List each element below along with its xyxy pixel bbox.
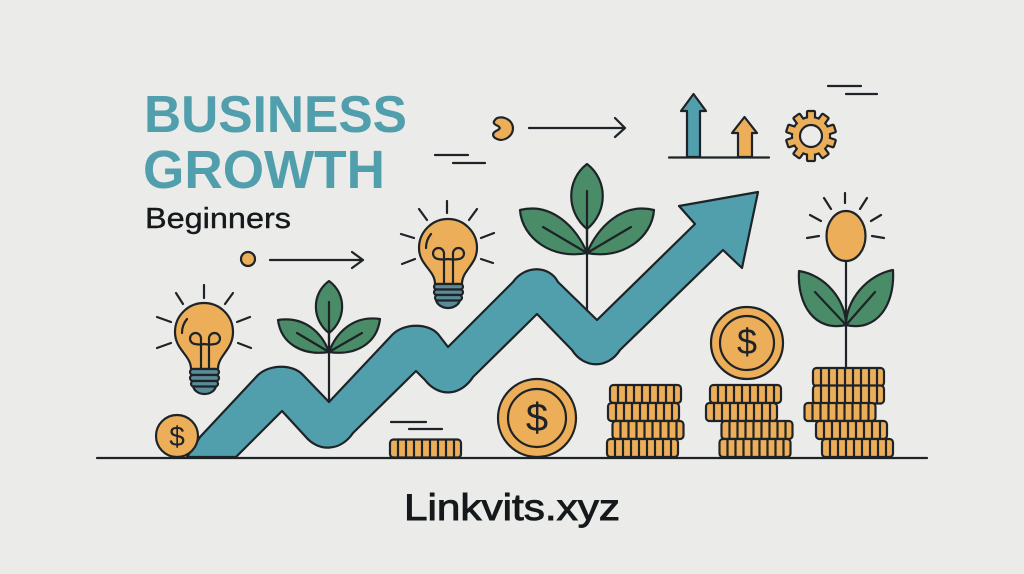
marker dot with arrow [241, 252, 363, 268]
icon: small dollar coin: $ [169, 421, 185, 452]
icon: plant large [520, 164, 654, 310]
orange up arrow [732, 117, 757, 157]
coin stack: four rows [607, 385, 684, 457]
title line: business: BUSINESS [144, 86, 407, 144]
subtitle: Beginners [145, 203, 291, 235]
heart marker with arrow [493, 117, 625, 140]
title [143, 86, 407, 200]
icon: large dollar coin [498, 379, 576, 457]
growth arrow [187, 192, 758, 457]
icon: dollar coin above stack: $ [737, 321, 757, 362]
title line: growth: GROWTH [143, 140, 385, 200]
icon: dollar coin above stack [711, 307, 783, 379]
coin stack: under coin [706, 385, 792, 457]
icon: bar arrows [669, 94, 769, 158]
icon: light bulb left [157, 285, 251, 394]
icon: plant small [278, 281, 380, 402]
icon: small dollar coin [156, 415, 198, 457]
icon: coin plant with sun rays [799, 193, 893, 368]
footer website text: Linkvits.xyz [404, 487, 620, 528]
coin stack: under plant [804, 368, 893, 457]
icon: light bulb middle [401, 201, 494, 308]
teal up arrow [681, 94, 706, 157]
icon: large dollar coin: $ [526, 396, 548, 440]
coin stack: single row [390, 440, 461, 458]
icon: gear [786, 111, 836, 161]
ground line [97, 457, 927, 459]
